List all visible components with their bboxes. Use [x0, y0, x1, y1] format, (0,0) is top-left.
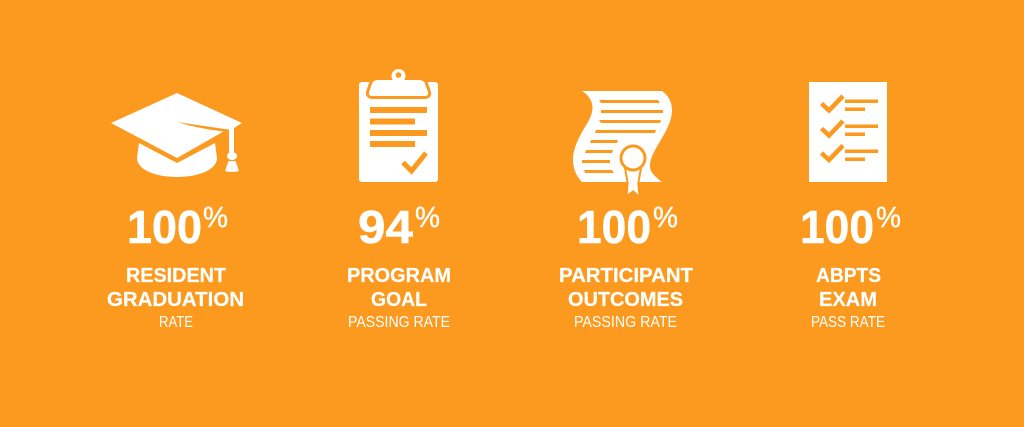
icon: certificate scroll: [573, 91, 672, 195]
stat: 100%: %: [653, 202, 678, 234]
label: resident graduation rate: [107, 265, 244, 331]
panel: participant outcomes passing rate: [559, 91, 693, 331]
stat: 94%: [358, 201, 440, 253]
label: resident graduation rate: RATE: [159, 314, 193, 331]
icon: clipboard: [359, 69, 438, 182]
label: participant outcomes passing rate: PASSING RATE: [574, 314, 677, 331]
label: resident graduation rate: RESIDENT: [126, 265, 226, 287]
stat: 94%: 94: [358, 201, 413, 253]
panel: resident graduation rate: [107, 93, 244, 331]
stat: 100%: %: [203, 202, 228, 234]
stat: 100%: 100: [577, 201, 651, 253]
label: participant outcomes passing rate: PARTICIPANT: [559, 265, 693, 287]
label: ABPTS exam pass rate: PASS RATE: [811, 314, 885, 331]
label: ABPTS exam pass rate: [811, 265, 885, 331]
label: participant outcomes passing rate: [559, 265, 693, 331]
label: program goal passing rate: [347, 265, 451, 331]
panel: ABPTS exam pass rate: [800, 82, 901, 331]
label: program goal passing rate: GOAL: [371, 289, 427, 311]
stat: 100%: 100: [800, 201, 874, 253]
stat: 100%: %: [876, 202, 901, 234]
stat: 100%: 100: [127, 201, 202, 253]
stat: 94%: %: [415, 202, 440, 234]
icon: graduation cap: [111, 93, 242, 177]
label: participant outcomes passing rate: OUTCOMES: [568, 289, 683, 311]
label: program goal passing rate: PASSING RATE: [348, 314, 450, 331]
icon: checklist: [809, 82, 887, 182]
panel: program goal passing rate: [347, 69, 451, 331]
label: program goal passing rate: PROGRAM: [347, 265, 451, 287]
label: ABPTS exam pass rate: ABPTS: [816, 265, 881, 287]
label: ABPTS exam pass rate: EXAM: [819, 289, 877, 311]
label: resident graduation rate: GRADUATION: [107, 289, 244, 311]
